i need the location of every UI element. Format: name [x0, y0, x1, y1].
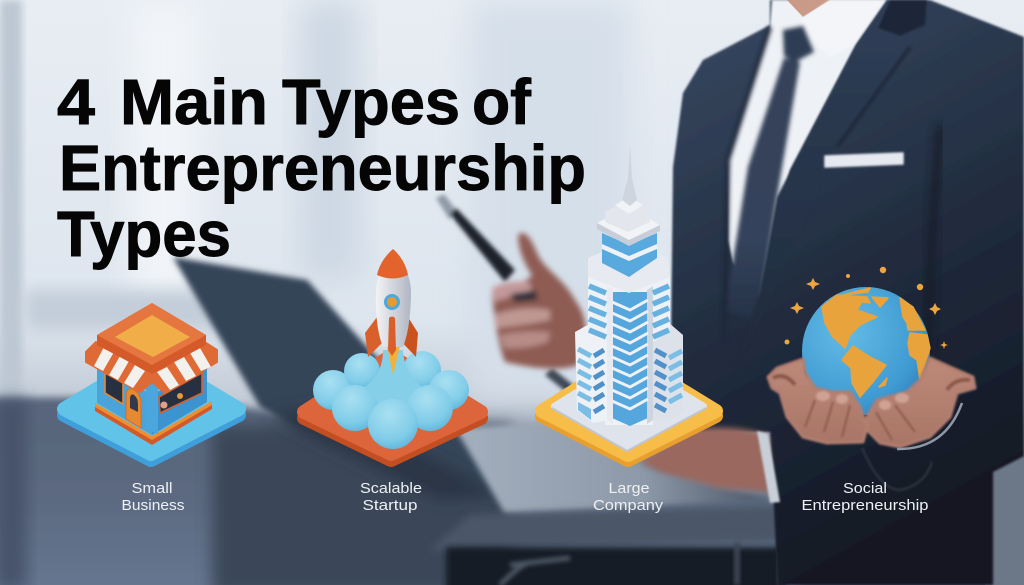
sleeve behind hand — [545, 368, 573, 395]
neck — [787, 0, 830, 17]
label: large company: Large — [608, 481, 650, 497]
title — [57, 66, 586, 270]
icon: social entrepreneurship globe in hands — [768, 267, 975, 449]
hands — [768, 358, 975, 447]
label: social entrepreneurship — [802, 481, 928, 514]
shop awning — [86, 342, 217, 393]
sparkles — [784, 267, 948, 349]
title: Entrepreneurship — [59, 132, 586, 204]
pen — [436, 194, 515, 282]
tower lower wings — [575, 322, 683, 423]
left lapel line — [724, 27, 770, 340]
suit sleeve seam — [925, 125, 940, 420]
shirt collar — [800, 0, 887, 58]
label: small business: Small — [132, 481, 172, 497]
continents — [822, 288, 930, 397]
label: scalable startup — [360, 481, 422, 514]
globe — [802, 287, 930, 415]
right edge wall below arm — [985, 455, 1024, 585]
laptop screen — [173, 257, 540, 510]
table edge — [430, 505, 785, 550]
tie — [725, 26, 814, 320]
label: social entrepreneurship: Entrepreneurship — [802, 498, 928, 514]
person hand holding pen — [492, 233, 586, 369]
table surface — [0, 397, 800, 585]
shop roof — [97, 303, 206, 374]
label: small business: Business — [122, 498, 184, 514]
shirt — [728, 0, 887, 300]
chair and floor below table — [446, 530, 786, 585]
forearm — [640, 428, 772, 492]
tower upper blocks — [588, 258, 670, 426]
label: large company: Company — [593, 498, 664, 514]
title: of — [472, 66, 532, 138]
pocket square — [825, 153, 903, 167]
suit lanyard curve — [862, 448, 932, 490]
title: 4 — [57, 66, 95, 138]
icon: large company skyscraper — [542, 145, 716, 460]
tower crown and spire — [597, 145, 660, 246]
title: Types — [57, 198, 231, 270]
icon: small business shop — [64, 303, 239, 460]
title: Main — [120, 66, 268, 138]
right lapel — [735, 0, 930, 370]
label: scalable startup: Startup — [362, 498, 418, 514]
label: small business — [122, 481, 184, 514]
label: social entrepreneurship: Social — [843, 481, 887, 497]
laptop keyboard — [455, 420, 770, 514]
tower shoulders — [588, 240, 670, 293]
person suit — [671, 0, 1024, 585]
label: large company — [593, 481, 664, 514]
shirt cuff of right wrist — [897, 403, 962, 449]
tower blue band — [602, 233, 657, 277]
title: Types — [282, 66, 460, 138]
icon: scalable startup rocket — [304, 249, 481, 460]
label: scalable startup: Scalable — [360, 481, 422, 497]
